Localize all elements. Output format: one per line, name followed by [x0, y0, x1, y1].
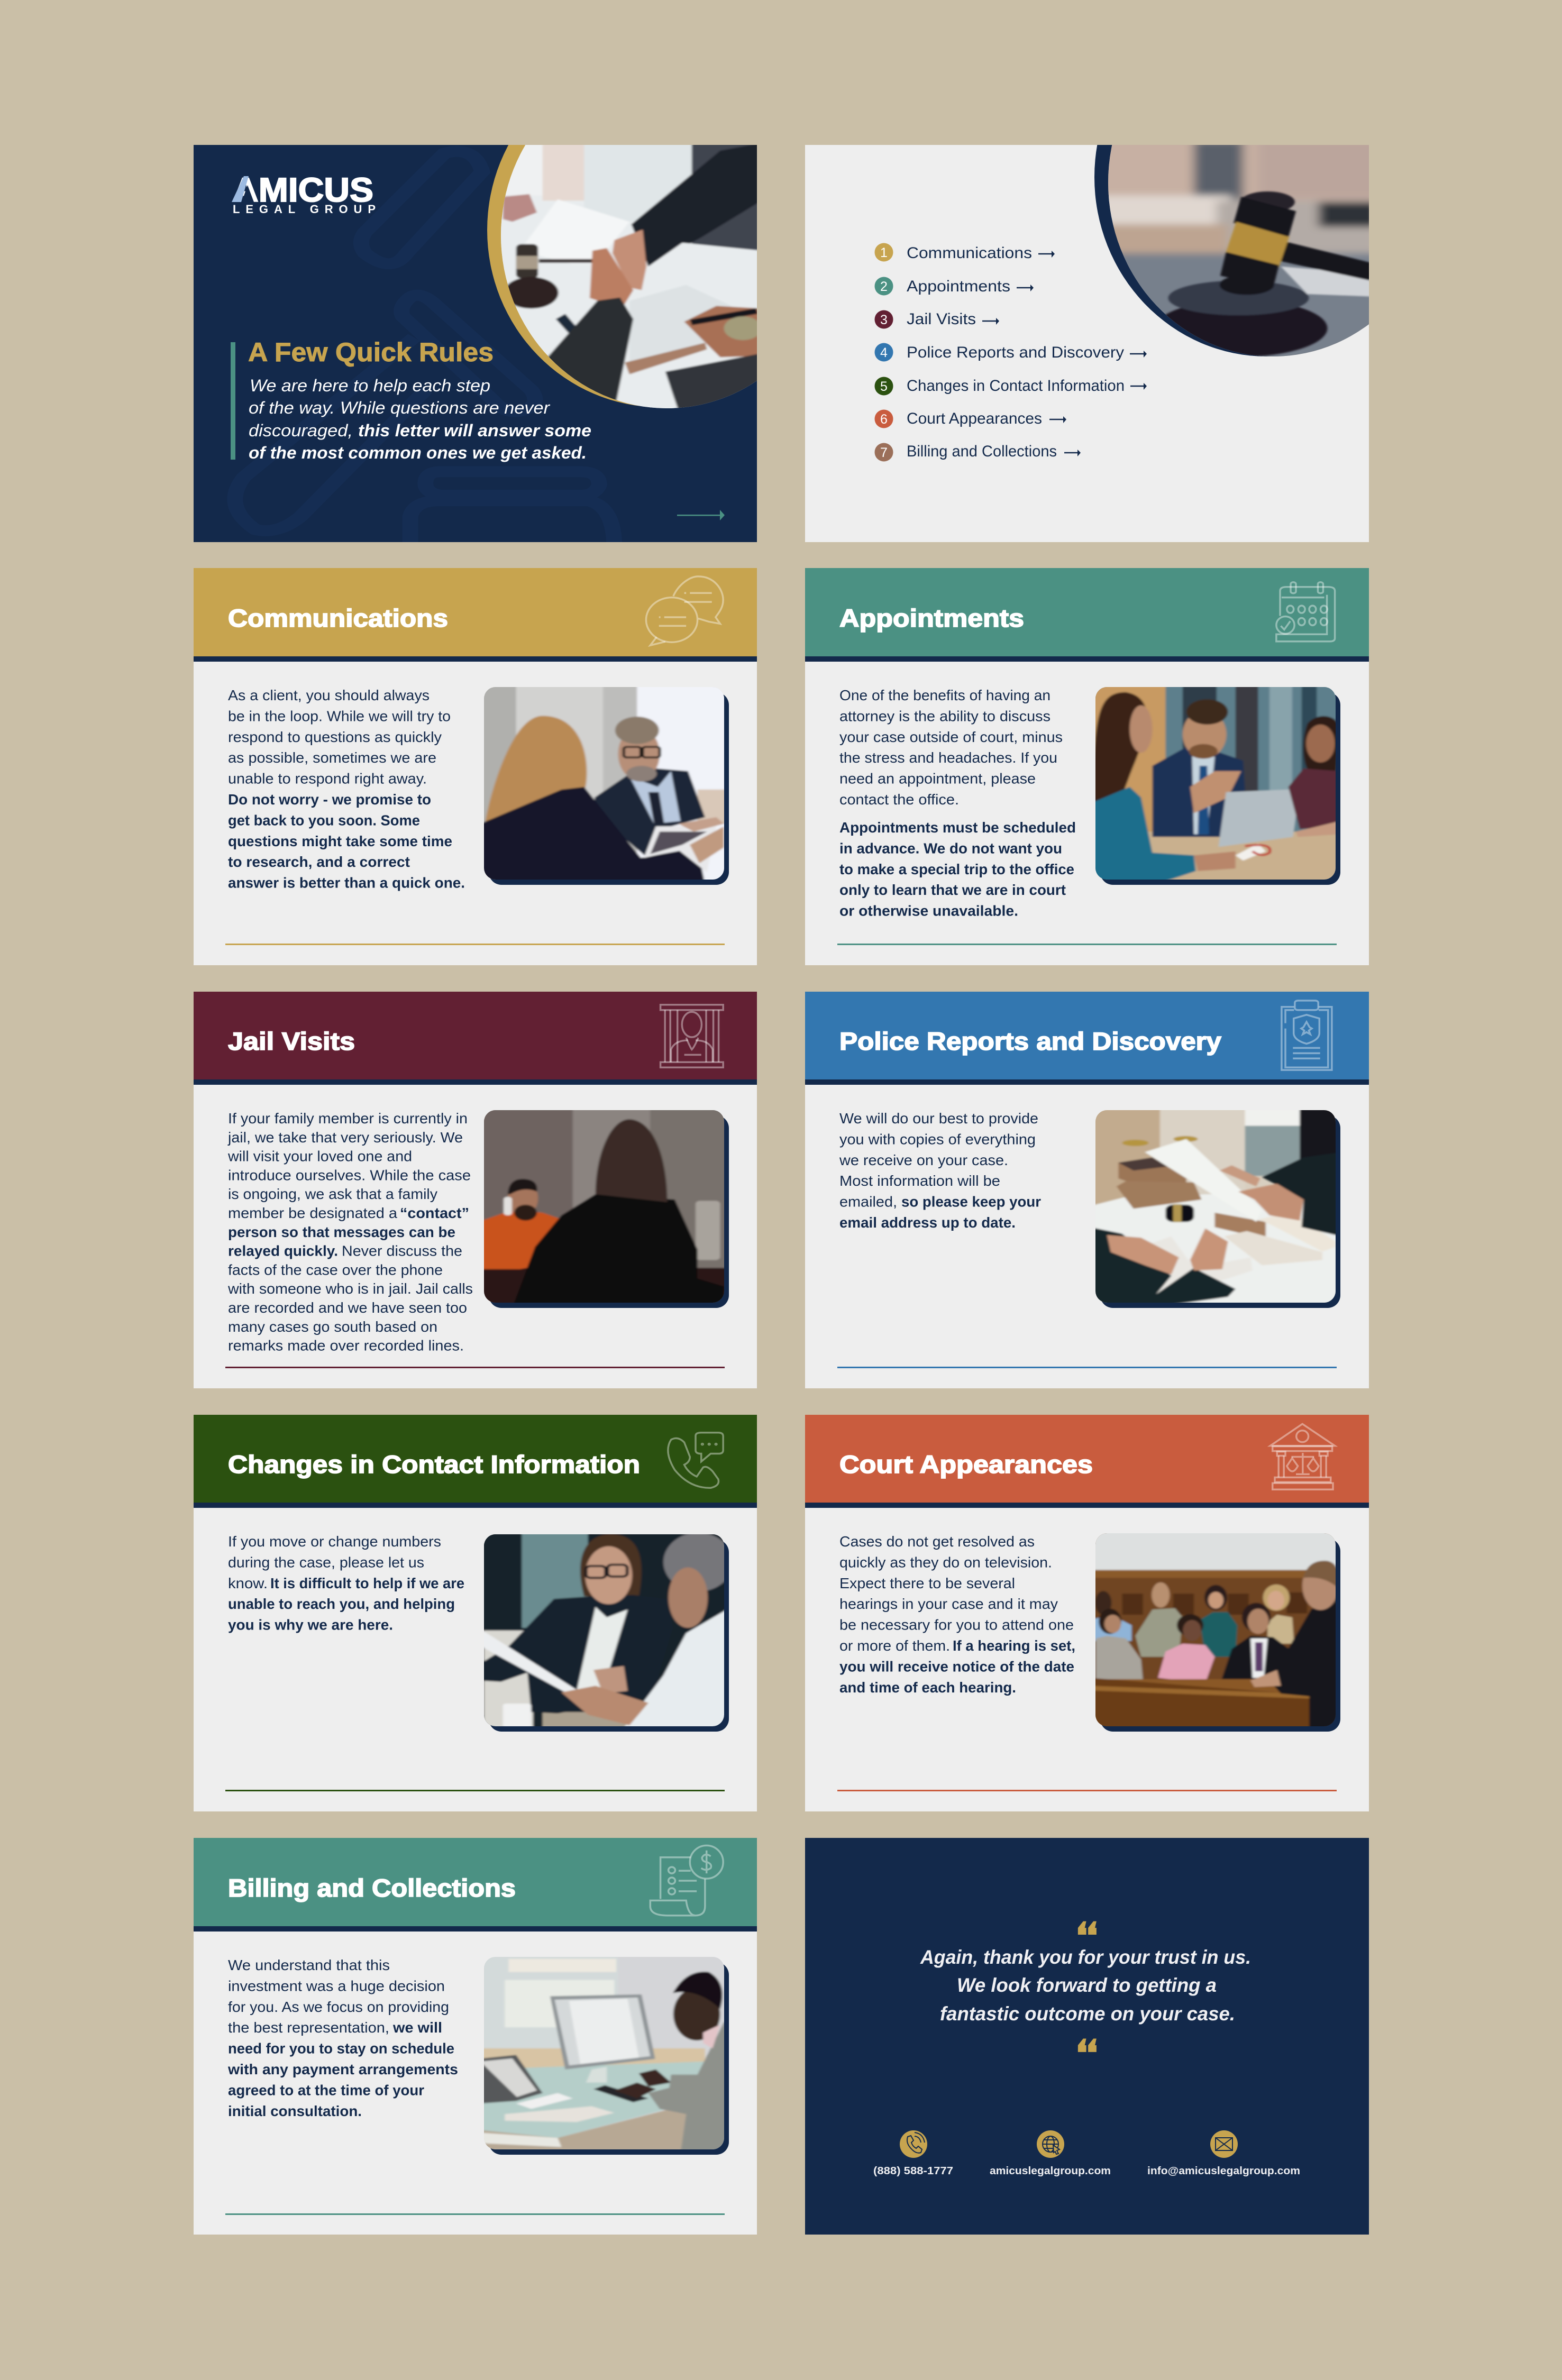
body text: as possible, sometimes we are — [228, 749, 436, 766]
heading: Communications — [228, 604, 448, 632]
body text: initial consultation. — [228, 2103, 362, 2119]
divider — [225, 2213, 725, 2215]
body text: we will — [392, 2019, 442, 2036]
body text: you will receive notice of the date — [839, 1658, 1074, 1674]
header band — [194, 1415, 757, 1503]
body text: so please keep your — [901, 1194, 1041, 1210]
photo: reviewing papers — [478, 1531, 733, 1736]
photo shadow — [489, 692, 729, 885]
arrow — [677, 510, 725, 520]
gold crescent — [487, 145, 641, 406]
body text: get back to you soon. Some — [228, 812, 420, 828]
body text: will visit your loved one and — [227, 1148, 412, 1165]
divider — [225, 944, 725, 945]
header band — [805, 568, 1369, 656]
accent bar — [231, 342, 235, 460]
contact: email: info@amicuslegalgroup.com — [1147, 2165, 1300, 2177]
body text: with any payment arrangements — [227, 2061, 458, 2077]
panel: contact info — [194, 1415, 757, 1811]
contact: website: amicuslegalgroup.com — [990, 2165, 1111, 2177]
item 2 — [875, 277, 1034, 295]
divider — [837, 1790, 1337, 1791]
body text: Appointments must be scheduled — [839, 819, 1076, 836]
body text: to research, and a correct — [228, 854, 410, 870]
item 5: Changes in Contact Information — [907, 377, 1125, 395]
body text — [839, 1533, 1075, 1696]
quote text — [920, 1946, 1251, 2025]
body text — [227, 1110, 473, 1354]
body text: hearings in your case and it may — [839, 1596, 1058, 1612]
item 3: 3 — [880, 313, 888, 327]
item 2: 2 — [880, 279, 888, 294]
item 1 — [875, 243, 1055, 262]
panel: appointments — [805, 568, 1369, 965]
body text: during the case, please let us — [228, 1554, 424, 1570]
body text: It is difficult to help if we are — [270, 1575, 464, 1591]
photo shadow — [489, 1540, 729, 1732]
panel: jail visits — [194, 992, 757, 1388]
item 3 — [875, 310, 999, 329]
body text: As a client, you should always — [228, 687, 430, 703]
body text: contact the office. — [839, 791, 959, 808]
body text: or more of them. — [839, 1637, 950, 1654]
body text: Expect there to be several — [839, 1575, 1015, 1591]
body text: questions might take some time — [228, 833, 452, 849]
photo shadow — [1100, 692, 1340, 885]
intro text — [249, 376, 591, 462]
body text: and time of each hearing. — [839, 1679, 1016, 1696]
body text: are recorded and we have seen too — [228, 1299, 467, 1316]
body text: respond to questions as quickly — [228, 729, 442, 745]
divider — [225, 1367, 725, 1368]
body text: is ongoing, we ask that a family — [228, 1186, 437, 1202]
body text: to make a special trip to the office — [839, 861, 1074, 877]
panel: court appearances — [805, 1415, 1369, 1811]
body text: need an appointment, please — [839, 771, 1036, 787]
item 5: 5 — [880, 379, 888, 394]
heading: Appointments — [839, 604, 1024, 632]
body text: unable to reach you, and helping — [228, 1596, 455, 1612]
panel: contents — [805, 0, 1439, 542]
photo: documents — [1090, 1107, 1341, 1307]
divider — [837, 944, 1337, 945]
intro text: of the most common ones we get asked. — [249, 443, 587, 462]
contact: website — [990, 2130, 1111, 2177]
body text: be in the loop. While we will try to — [228, 708, 451, 724]
photo: jury — [1090, 1531, 1343, 1731]
icon: opening quote mark — [1078, 1921, 1097, 1935]
panel: communications — [194, 568, 757, 965]
item 4: Police Reports and Discovery — [907, 344, 1124, 361]
body text — [228, 687, 465, 891]
body text: your case outside of court, minus — [839, 729, 1063, 745]
contact: phone — [873, 2130, 953, 2177]
body text: agreed to at the time of your — [228, 2082, 424, 2098]
body text: only to learn that we are in court — [839, 882, 1066, 898]
quote text: Again, thank you for your trust in us. — [920, 1946, 1251, 1968]
item 1: Communications — [907, 244, 1032, 262]
body text — [839, 1110, 1041, 1231]
item 2: Appointments — [907, 278, 1010, 295]
body text: quickly as they do on television. — [839, 1554, 1052, 1570]
intro text: of the way. While questions are never — [249, 398, 550, 417]
body text: investment was a huge decision — [228, 1978, 445, 1994]
panel: cover — [194, 145, 757, 542]
contact: email — [1147, 2130, 1300, 2177]
item 1: 1 — [880, 245, 888, 260]
item 6: Court Appearances — [907, 410, 1042, 427]
heading: Police Reports and Discovery — [839, 1027, 1221, 1055]
item 6: 6 — [880, 412, 888, 427]
photo: handshake — [501, 145, 757, 408]
photo: invoice desk — [478, 1954, 732, 2154]
body text: remarks made over recorded lines. — [228, 1338, 464, 1354]
body text: or otherwise unavailable. — [839, 903, 1018, 919]
body text: unable to respond right away. — [228, 771, 427, 787]
body text: need for you to stay on schedule — [228, 2040, 454, 2057]
body text: many cases go south based on — [228, 1319, 437, 1335]
quote text: We look forward to getting a — [957, 1974, 1217, 1996]
heading: Billing and Collections — [228, 1874, 516, 1902]
icon: speech bubbles — [646, 576, 723, 645]
contact: phone: (888) 588-1777 — [873, 2165, 953, 2177]
body text: for you. As we focus on providing — [228, 1999, 449, 2015]
body text — [228, 1533, 464, 1633]
photo shadow — [1100, 1115, 1340, 1308]
icon: jail cell — [661, 1005, 723, 1067]
intro text: We are here to help each step — [250, 376, 490, 395]
icon: invoice — [650, 1845, 723, 1916]
header band — [194, 568, 757, 656]
body text: with someone who is in jail. Jail calls — [227, 1280, 473, 1297]
body text: emailed, — [839, 1194, 897, 1210]
icon: phone chat — [668, 1433, 723, 1488]
body text: “contact” — [400, 1205, 469, 1221]
logo: LEGAL GROUP — [233, 203, 376, 216]
body text: relayed quickly. — [228, 1243, 338, 1259]
photo shadow — [1100, 1539, 1340, 1732]
item 4: 4 — [880, 345, 888, 360]
body text: Cases do not get resolved as — [839, 1533, 1035, 1550]
icon: courthouse — [1270, 1424, 1335, 1489]
body text: jail, we take that very seriously. We — [227, 1129, 463, 1146]
body text: the stress and headaches. If you — [839, 749, 1057, 766]
intro text: discouraged, — [249, 421, 353, 440]
item 7: Billing and Collections — [907, 443, 1057, 460]
navy crescent — [1094, 0, 1439, 356]
quote text: fantastic outcome on your case. — [940, 2003, 1235, 2025]
body text: you is why we are here. — [228, 1617, 393, 1633]
body text: If you move or change numbers — [228, 1533, 441, 1550]
header band — [194, 992, 757, 1079]
intro text: this letter will answer some — [358, 421, 591, 440]
body text: member be designated a — [228, 1205, 397, 1221]
body text: know. — [228, 1575, 268, 1591]
header band — [805, 992, 1369, 1079]
body text: attorney is the ability to discuss — [839, 708, 1051, 724]
body text: you with copies of everything — [839, 1131, 1036, 1147]
body text: facts of the case over the phone — [228, 1261, 443, 1278]
photo: jail visit — [478, 1107, 729, 1307]
item 6 — [875, 409, 1066, 428]
body text: Never discuss the — [342, 1243, 462, 1259]
item 7: 7 — [880, 445, 888, 460]
body text: the best representation, — [228, 2019, 389, 2036]
photo: client meeting — [478, 684, 728, 884]
heading: Changes in Contact Information — [228, 1450, 640, 1478]
body text: If your family member is currently in — [228, 1110, 468, 1127]
heading: Jail Visits — [228, 1027, 355, 1055]
divider — [837, 1367, 1337, 1368]
body text: person so that messages can be — [228, 1224, 455, 1240]
body text: One of the benefits of having an — [839, 687, 1051, 703]
body text: answer is better than a quick one. — [228, 875, 465, 891]
body text — [227, 1957, 458, 2119]
icon: closing quote mark — [1078, 2039, 1097, 2052]
body text: We will do our best to provide — [839, 1110, 1038, 1127]
body text: We understand that this — [228, 1957, 390, 1973]
photo shadow — [489, 1115, 729, 1308]
watermark: gavel — [235, 151, 614, 548]
photo: gavel — [1090, 138, 1391, 365]
header band — [194, 1838, 757, 1926]
body text: be necessary for you to attend one — [839, 1617, 1074, 1633]
body text: If a hearing is set, — [953, 1637, 1075, 1654]
divider — [225, 1790, 725, 1791]
photo: attorney discussion — [1090, 684, 1343, 884]
body text: introduce ourselves. While the case — [228, 1167, 471, 1183]
item 3: Jail Visits — [907, 310, 976, 328]
body text: Do not worry - we promise to — [228, 791, 431, 808]
panel: billing — [194, 1838, 757, 2235]
header band — [805, 1415, 1369, 1503]
icon: calendar — [1276, 582, 1335, 642]
logo: AMICUS — [233, 171, 373, 209]
heading: A Few Quick Rules — [248, 337, 494, 367]
heading: Court Appearances — [839, 1450, 1093, 1478]
body text: email address up to date. — [839, 1214, 1016, 1231]
panel: closing — [805, 1838, 1369, 2235]
body text: Most information will be — [839, 1173, 1000, 1189]
body text: we receive on your case. — [839, 1152, 1008, 1168]
body text: in advance. We do not want you — [839, 840, 1062, 856]
photo shadow — [489, 1962, 729, 2155]
body text — [839, 687, 1076, 919]
icon: clipboard badge — [1282, 1001, 1332, 1070]
panel: police reports — [805, 992, 1369, 1388]
contents list — [875, 243, 1147, 461]
